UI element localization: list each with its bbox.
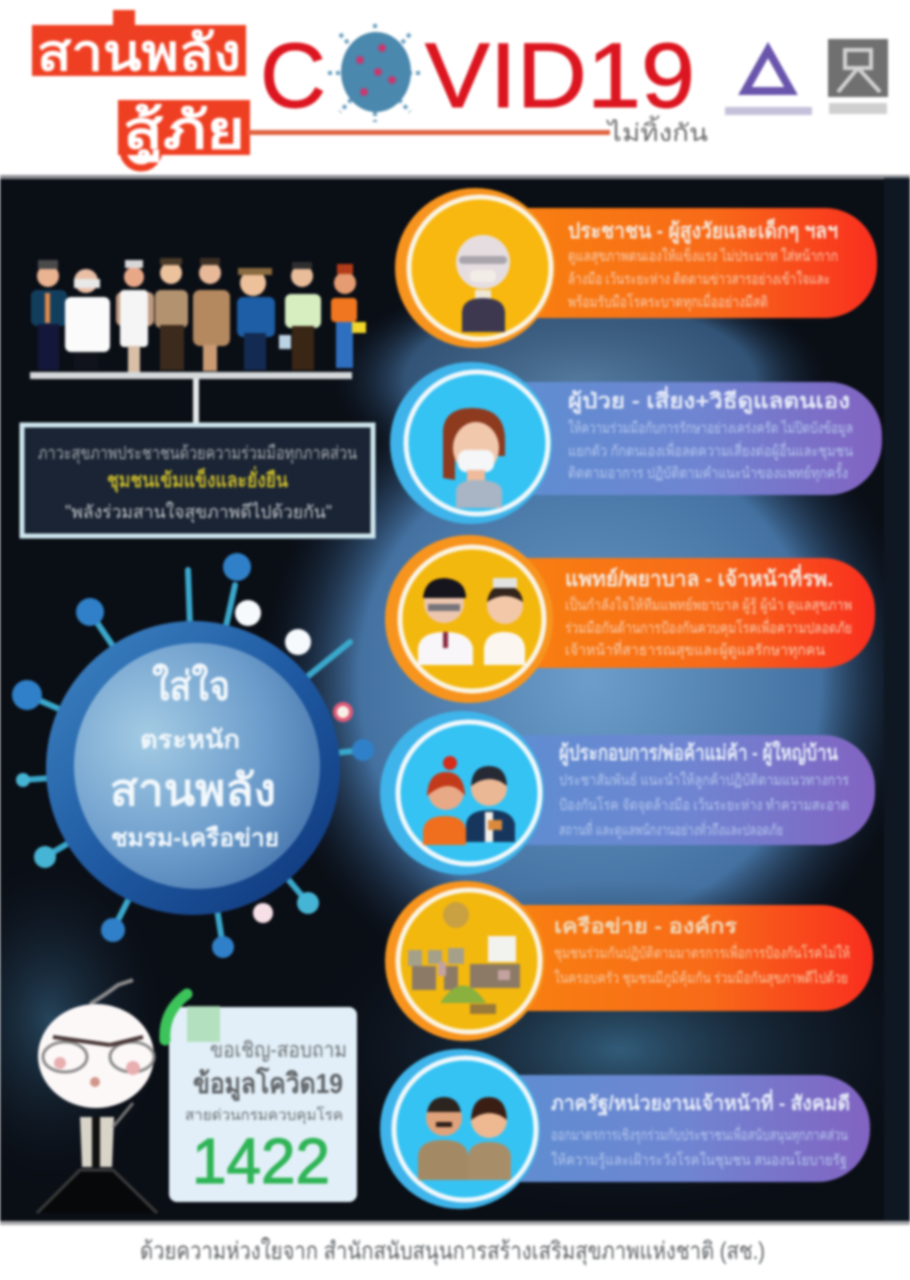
virus text: สานพลัง bbox=[110, 766, 276, 815]
row 4: circle icon vendors bbox=[380, 711, 544, 875]
person: businessman bbox=[31, 260, 67, 370]
hotline card: สายด่วนกรมควบคุมโรค bbox=[185, 1106, 343, 1125]
callout box: สร้างความร่วมมือ: ภาวะสุขภาพประชาชนด้วยความร่วมมือทุกภาคส่วน bbox=[38, 443, 357, 464]
person: worker bbox=[331, 264, 366, 368]
big virus illustration bbox=[12, 553, 374, 958]
hotline card bbox=[165, 994, 357, 1202]
title badge: สานพลัง สู้ภัย bbox=[32, 10, 250, 168]
logo: grey seal bbox=[828, 39, 888, 114]
row 1: pill: ดูแลสุขภาพตนเองให้แข็งแรง ไม่ประมาท ใส่หน้ากาก bbox=[568, 246, 838, 266]
row 1: pill: ล้างมือ เว้นระยะห่าง ติดตามข่าวสารอย่างเข้าใจและ bbox=[568, 270, 830, 288]
hotline card: 1422 bbox=[192, 1125, 330, 1197]
row 3: pill: แพทย์/พยาบาล - เจ้าหน้าที่รพ. bbox=[565, 563, 833, 591]
heading: COVID19: C bbox=[260, 25, 326, 127]
row 5: circle icon community bbox=[385, 881, 545, 1041]
footer: ด้วยความห่วงใยจาก สำนักสนับสนุนการสร้างเสริมสุขภาพแห่งชาติ (สช.) bbox=[140, 1237, 765, 1266]
virus text: ใส่ใจ bbox=[152, 663, 230, 709]
row 5: pill: เครือข่าย - องค์กร bbox=[554, 915, 737, 938]
mascot character bbox=[37, 980, 157, 1213]
row 3: pill: เจ้าหน้าที่สาธารณสุขและผู้ดูแลรักษาทุกคน bbox=[565, 639, 825, 660]
row 2: pill: ติดตามอาการ ปฏิบัติตามคำแนะนำของแพทย์ทุกครั้ง bbox=[568, 462, 848, 483]
people group illustration bbox=[30, 258, 366, 425]
row 2: circle icon woman with mask bbox=[390, 362, 552, 524]
row 6: pill: ภาครัฐ/หน่วยงานเจ้าหน้าที่ - สังคมดี bbox=[551, 1088, 850, 1117]
virus text: ตระหนัก bbox=[140, 726, 240, 754]
header background bbox=[0, 0, 910, 175]
title badge: สานพลัง สู้ภัย: สู้ภัย bbox=[123, 102, 245, 163]
person: officer man bbox=[155, 258, 188, 370]
person: shopper bbox=[279, 262, 321, 370]
heading: COVID19 bbox=[260, 25, 695, 127]
title badge: สานพลัง สู้ภัย: สานพลัง bbox=[37, 25, 241, 81]
person: officer woman bbox=[193, 258, 230, 371]
icon: virus in heading bbox=[328, 24, 424, 122]
row 4: pill: ประชาสัมพันธ์ แนะนำให้ลูกค้าปฏิบัติตามแนวทางการ bbox=[559, 771, 849, 789]
icon: green phone bbox=[165, 994, 220, 1042]
person: farmer bbox=[237, 268, 275, 370]
row 1: pill: ประชาชน - ผู้สูงวัยและเด็กๆ ฯลฯ bbox=[568, 217, 838, 245]
person: doctor bbox=[65, 269, 110, 370]
row 5: pill bbox=[465, 905, 873, 1011]
logo: purple triangle bbox=[725, 50, 812, 115]
subtitle line and text bbox=[248, 115, 708, 147]
row 6: pill: ให้ความรู้และเฝ้าระวังโรคในชุมชน สนองนโยบายรัฐ bbox=[551, 1151, 847, 1170]
row 3: circle icon doctor and nurse bbox=[385, 535, 553, 703]
row 2: pill: แยกตัว กักตนเองเพื่อลดความเสี่ยงต่อผู้อื่นและชุมชน bbox=[568, 440, 853, 461]
callout box: สร้างความร่วมมือ: "พลังร่วมสานใจสุขภาพดีไปด้วยกัน" bbox=[65, 501, 332, 523]
row 1: pill: พร้อมรับมือโรคระบาดทุกเมื่ออย่างมีสติ bbox=[568, 291, 768, 312]
row 2: pill: ผู้ป่วย - เสี่ยง+วิธีดูแลตนเอง bbox=[568, 385, 850, 415]
row 1: pill bbox=[470, 208, 877, 318]
row 3: pill: เป็นกำลังใจให้ทีมแพทย์พยาบาล ผู้รู้ ผู้นำ ดูแลสุขภาพ bbox=[565, 595, 852, 615]
row 5: pill: ในครอบครัว ชุมชนมีภูมิคุ้มกัน ร่วมมือกันสุขภาพดีไปด้วย bbox=[554, 969, 848, 988]
hotline card: ขอเชิญ-สอบถาม bbox=[210, 1039, 347, 1062]
callout box: สร้างความร่วมมือ bbox=[22, 425, 373, 536]
row 3: pill bbox=[468, 558, 875, 668]
row 1: circle icon elderly bbox=[395, 188, 555, 348]
row 6: circle icon officers bbox=[380, 1049, 540, 1209]
hotline card: ข้อมูลโควิด19 bbox=[193, 1066, 343, 1101]
row 2: pill bbox=[470, 382, 882, 495]
heading: COVID19: VID19 bbox=[425, 25, 695, 127]
row 6: pill bbox=[460, 1075, 870, 1182]
row 3: pill: ร่วมมือกันด้านการป้องกันควบคุมโรคเพื่อความปลอดภัย bbox=[565, 617, 852, 638]
callout box: สร้างความร่วมมือ: ชุมชนเข้มแข็งและยั่งยืน bbox=[107, 465, 288, 493]
row 4: pill: สถานที่ และดูแลพนักงานอย่างทั่วถึงและปลอดภัย bbox=[559, 819, 783, 839]
subtitle line and text: ไม่ทิ้งกัน bbox=[606, 115, 708, 147]
virus text bbox=[110, 663, 279, 852]
row 4: pill: ป้องกันโรค จัดจุดล้างมือ เว้นระยะห่าง ทำความสะอาด bbox=[559, 796, 849, 815]
person: nurse bbox=[116, 260, 154, 373]
row 4: pill: ผู้ประกอบการ/พ่อค้าแม่ค้า - ผู้ใหญ่บ้าน bbox=[559, 740, 839, 767]
virus text: ชมรม-เครือข่าย bbox=[111, 825, 279, 852]
footer bbox=[0, 1221, 910, 1280]
row 4: pill bbox=[462, 735, 875, 845]
